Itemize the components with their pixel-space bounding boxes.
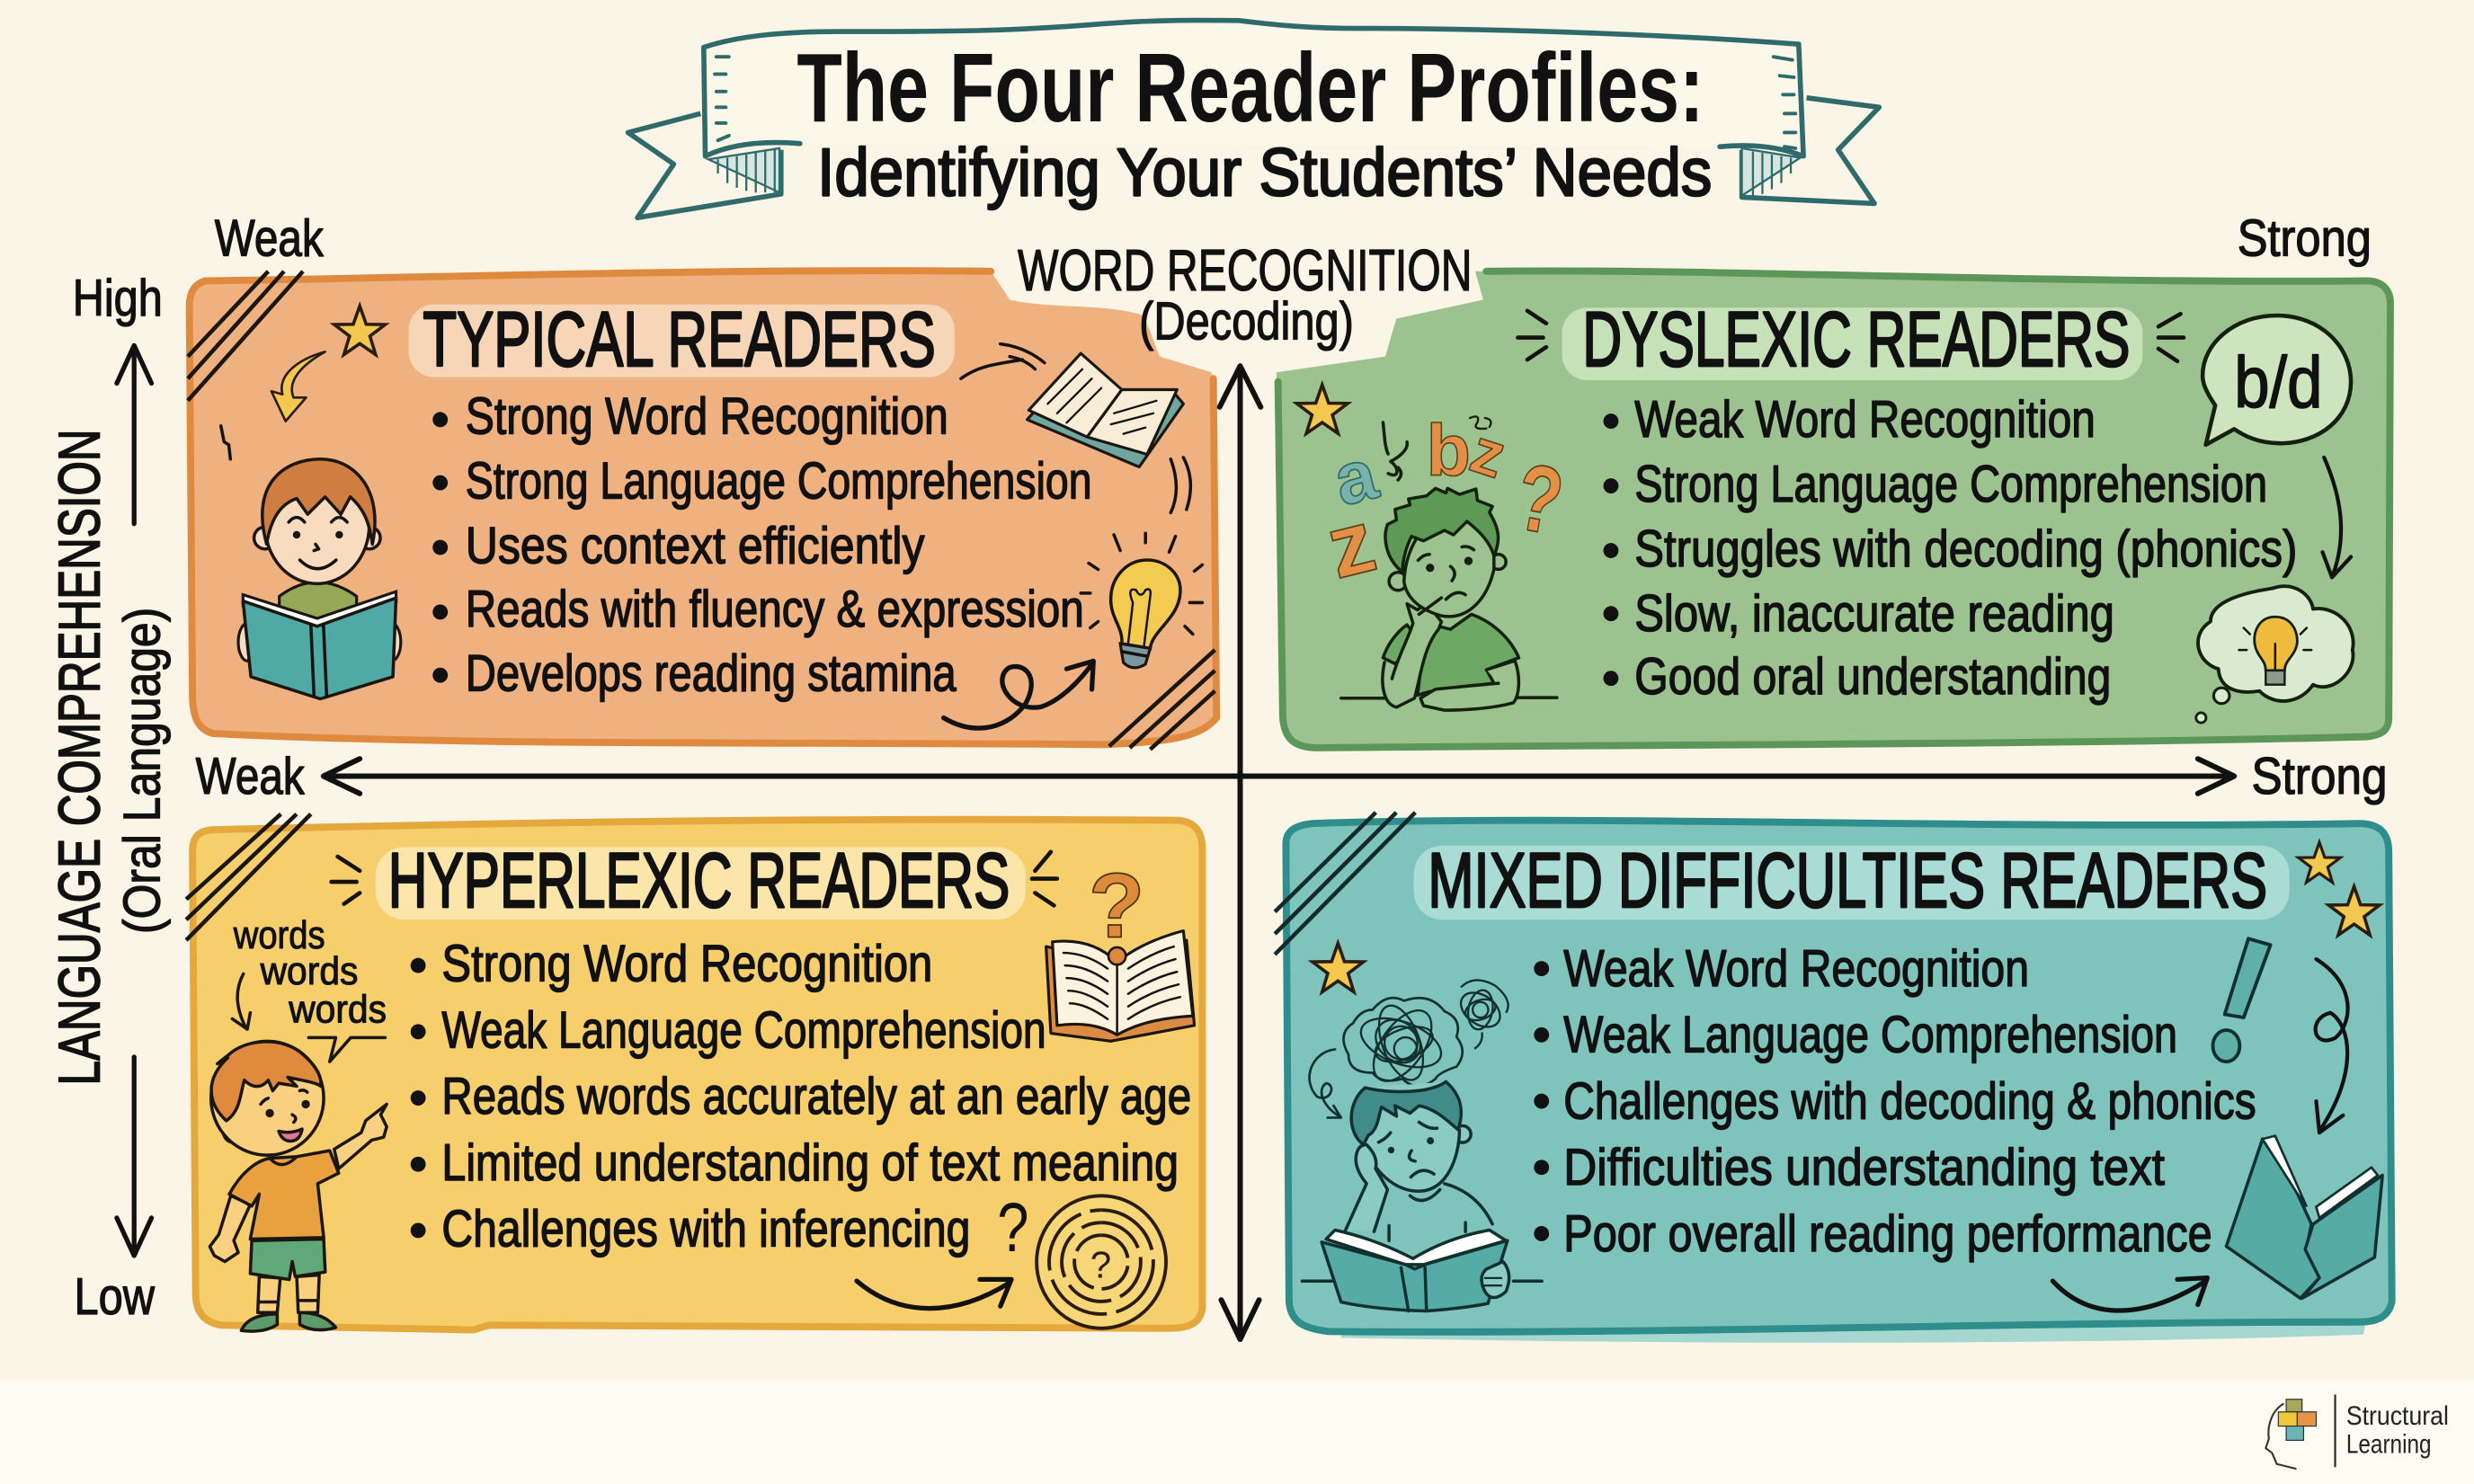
icon: thinking boy bbox=[1341, 416, 1557, 710]
floating letters: a bbox=[1326, 433, 1385, 521]
hatch marks bottom right bbox=[1109, 650, 1215, 750]
bullet list bbox=[432, 388, 1092, 703]
icon: star bbox=[1296, 385, 1348, 433]
banner ribbon fill bbox=[704, 21, 1803, 156]
words label: words bbox=[233, 913, 325, 957]
bullet list: Challenges with inferencing bbox=[441, 1201, 970, 1258]
words label: words bbox=[260, 949, 358, 993]
icon: open book bbox=[1028, 353, 1183, 467]
logo head icon bbox=[2265, 1404, 2296, 1469]
heading: HYPERLEXIC READERS bbox=[388, 838, 1010, 924]
arrow: loop down bbox=[2316, 959, 2348, 1133]
bullet list: Struggles with decoding (phonics) bbox=[1634, 520, 2297, 578]
horizontal axis arrow: language comprehension divider bbox=[324, 759, 2234, 794]
panel background bbox=[1277, 271, 2390, 748]
bullet list: Weak Word Recognition bbox=[1563, 940, 2029, 998]
squiggle mark bbox=[221, 426, 230, 459]
heading highlight bbox=[376, 847, 1026, 920]
bullet list bbox=[1604, 391, 2297, 706]
heading highlight bbox=[1562, 307, 2142, 380]
panel background bbox=[192, 820, 1202, 1330]
icon: speech bubble b/d bbox=[2203, 315, 2351, 445]
logo text bbox=[2346, 1401, 2449, 1459]
icon: thought cloud with bulb bbox=[2196, 586, 2354, 723]
heading highlight bbox=[409, 305, 955, 377]
language comprehension axis label bbox=[47, 429, 171, 1085]
icon: maze bbox=[1037, 1195, 1166, 1328]
icon: open book with lines bbox=[1046, 930, 1195, 1041]
panel background bbox=[190, 271, 1216, 744]
bullet list: Poor overall reading performance bbox=[1563, 1205, 2212, 1263]
banner left fold hatching bbox=[708, 148, 779, 192]
bullet list: Difficulties understanding text bbox=[1563, 1139, 2165, 1196]
icon: maze: ? bbox=[1090, 1244, 1111, 1286]
banner right tail bbox=[1742, 98, 1879, 203]
heading: TYPICAL READERS bbox=[423, 297, 936, 383]
logo: structural learning bbox=[2265, 1394, 2449, 1469]
hatch marks top left bbox=[1275, 813, 1415, 955]
hatch marks top left bbox=[188, 271, 303, 401]
axis label: weak top: Weak bbox=[215, 209, 325, 267]
word recognition axis label: (Decoding) bbox=[1139, 290, 1354, 351]
icon: exclamation mark bbox=[2213, 938, 2271, 1062]
axis label: low: Low bbox=[75, 1268, 155, 1326]
banner ribbon outline bbox=[704, 21, 1803, 156]
panel: mixed difficulties readers bbox=[1275, 813, 2392, 1343]
banner right fold hatching bbox=[1742, 148, 1801, 196]
panel wash bbox=[1341, 1316, 2367, 1343]
banner left tail bbox=[628, 113, 781, 218]
bullet list: Weak Language Comprehension bbox=[441, 1001, 1046, 1059]
icon: curved yellow arrow bbox=[271, 351, 325, 422]
bullet list: Strong Language Comprehension bbox=[466, 453, 1092, 511]
motion marks near book bbox=[961, 344, 1190, 512]
arrow: comprehension up bbox=[117, 345, 152, 524]
heading: DYSLEXIC READERS bbox=[1582, 297, 2130, 383]
title banner bbox=[628, 21, 1879, 218]
panel: typical readers bbox=[188, 271, 1216, 750]
word recognition axis label bbox=[1018, 237, 1473, 351]
bullet list: Strong Word Recognition bbox=[441, 936, 932, 993]
floating letters: ? bbox=[1508, 444, 1571, 555]
hatch marks top left bbox=[186, 814, 311, 940]
title: The Four Reader Profiles: bbox=[796, 33, 1704, 143]
axis label: strong top: Strong bbox=[2238, 209, 2372, 267]
bullet list: Strong Language Comprehension bbox=[1634, 456, 2267, 513]
icon: boy reading bbox=[238, 459, 401, 698]
bullet list: Develops reading stamina bbox=[466, 645, 957, 703]
icon: pointing boy bbox=[209, 973, 387, 1331]
panel background bbox=[1286, 821, 2392, 1332]
icon: star bbox=[334, 306, 386, 354]
small question mark: ? bbox=[997, 1189, 1028, 1266]
arrow: curved right bbox=[2052, 1278, 2207, 1311]
floating letters: z bbox=[1463, 414, 1515, 492]
bullet list: Uses context efficiently bbox=[466, 518, 925, 575]
bullet list: Reads words accurately at an early age bbox=[441, 1068, 1191, 1125]
heading highlight bbox=[1414, 846, 2290, 920]
icon: speech bubble b/d: b/d bbox=[2234, 342, 2322, 423]
floating letters bbox=[1318, 410, 1571, 597]
words label: words bbox=[288, 987, 387, 1031]
arrow: comprehension down bbox=[117, 1057, 152, 1256]
banner stitching bbox=[715, 57, 1795, 148]
bullet list: Good oral understanding bbox=[1634, 648, 2111, 706]
bullet list: Weak Language Comprehension bbox=[1563, 1007, 2177, 1064]
arrow: loop bbox=[944, 661, 1093, 728]
heading accent marks bbox=[1517, 311, 2184, 361]
arrow: curved down bbox=[2322, 458, 2351, 577]
logo text: Structural bbox=[2346, 1401, 2449, 1431]
bullet list bbox=[411, 936, 1191, 1258]
bullet list: Challenges with decoding & phonics bbox=[1563, 1072, 2256, 1130]
icon: stars right bbox=[2299, 842, 2380, 935]
language comprehension axis label: (Oral Language) bbox=[113, 608, 171, 934]
icon: question mark orange: ? bbox=[1089, 855, 1144, 957]
word recognition axis label: WORD RECOGNITION bbox=[1018, 237, 1473, 303]
icon: broken book bbox=[2226, 1136, 2382, 1298]
floating letters: b bbox=[1427, 410, 1471, 491]
subtitle: Identifying Your Students’ Needs bbox=[817, 135, 1712, 210]
language comprehension axis label: LANGUAGE COMPREHENSION bbox=[47, 429, 112, 1085]
bullet list: Limited understanding of text meaning bbox=[441, 1134, 1179, 1192]
axis label: weak middle: Weak bbox=[196, 748, 306, 805]
bullet list: Weak Word Recognition bbox=[1634, 391, 2096, 449]
bullet list: Strong Word Recognition bbox=[466, 388, 948, 446]
icon: star left bbox=[1313, 944, 1364, 992]
bullet list: Slow, inaccurate reading bbox=[1634, 585, 2114, 643]
words label bbox=[233, 913, 387, 1031]
vertical axis arrow: word recognition bbox=[1220, 366, 1260, 1339]
logo coloured squares bbox=[2278, 1400, 2316, 1440]
logo divider bbox=[2335, 1394, 2336, 1467]
panel: hyperlexic readers bbox=[186, 814, 1202, 1331]
arrow: curved right bbox=[857, 1279, 1011, 1309]
axis label: strong middle: Strong bbox=[2252, 748, 2387, 805]
icon: light bulb bbox=[1081, 533, 1202, 668]
logo text: Learning bbox=[2346, 1429, 2432, 1459]
panel border bbox=[190, 271, 1216, 744]
bullet list: Reads with fluency & expression bbox=[466, 581, 1084, 638]
icon: overwhelmed boy with scribble thoughts bbox=[1302, 980, 1542, 1311]
panel border bbox=[1278, 271, 2390, 748]
floating letters: z bbox=[1318, 491, 1384, 597]
bullet list bbox=[1534, 940, 2256, 1263]
panel: dyslexic readers bbox=[1277, 271, 2390, 748]
heading accent marks bbox=[332, 852, 1057, 905]
axis label: high: High bbox=[73, 270, 163, 327]
